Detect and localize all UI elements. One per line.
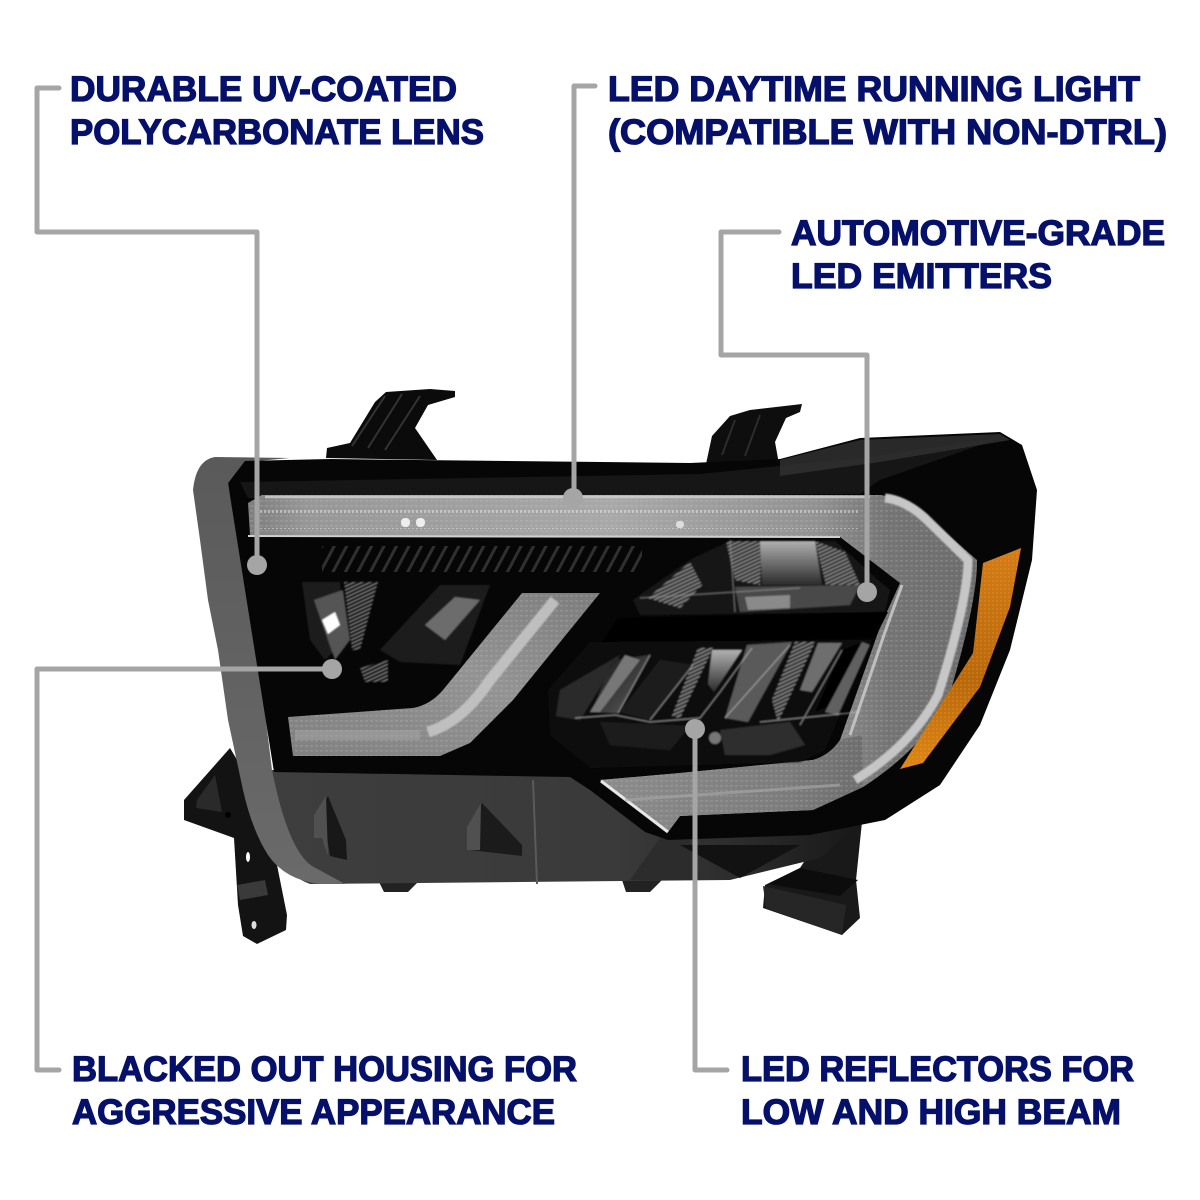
label: durable lens: POLYCARBONATE LENS (70, 113, 484, 152)
top right clip (706, 404, 802, 464)
black main body (228, 432, 1037, 840)
label: daytime running light: LED DAYTIME RUNNING LIGHT (608, 70, 1140, 109)
left mounting bracket (184, 748, 287, 944)
left projector reflections (302, 582, 490, 682)
leader: blacked out housing (37, 659, 342, 1070)
label: blacked out housing: BLACKED OUT HOUSING FOR (72, 1050, 577, 1089)
lower left running light (288, 593, 600, 756)
label: durable lens: DURABLE UV-COATED (70, 70, 457, 109)
clear lens top stripe (780, 434, 1010, 476)
leader: LED emitters (721, 232, 877, 602)
leader: daytime running light (563, 86, 595, 508)
amber side marker (900, 548, 1021, 769)
lower housing (250, 770, 860, 884)
headlight product illustration (184, 389, 1037, 944)
top left clip (326, 389, 455, 460)
lower LED reflector (548, 640, 872, 768)
label: blacked out housing: AGGRESSIVE APPEARANCE (72, 1093, 555, 1132)
upper body highlight band (240, 438, 1000, 498)
serrated reflector strip (322, 546, 642, 572)
leader: LED reflectors (685, 719, 727, 1070)
right mounting block (763, 822, 862, 935)
label: LED reflectors: LED REFLECTORS FOR (741, 1050, 1134, 1089)
label: LED emitters: AUTOMOTIVE-GRADE (791, 214, 1165, 253)
label: daytime running light: (COMPATIBLE WITH NON-DTRL) (608, 113, 1167, 152)
leader lines and dots (37, 86, 877, 1070)
label: LED emitters: LED EMITTERS (791, 257, 1052, 296)
leader: polycarbonate lens (37, 88, 267, 575)
grey outer bezel (193, 457, 345, 884)
label: LED reflectors: LOW AND HIGH BEAM (741, 1093, 1121, 1132)
top and side running light (248, 495, 977, 832)
black divider bar (600, 612, 888, 645)
upper LED reflector (633, 540, 890, 615)
bottom tabs (378, 880, 662, 892)
